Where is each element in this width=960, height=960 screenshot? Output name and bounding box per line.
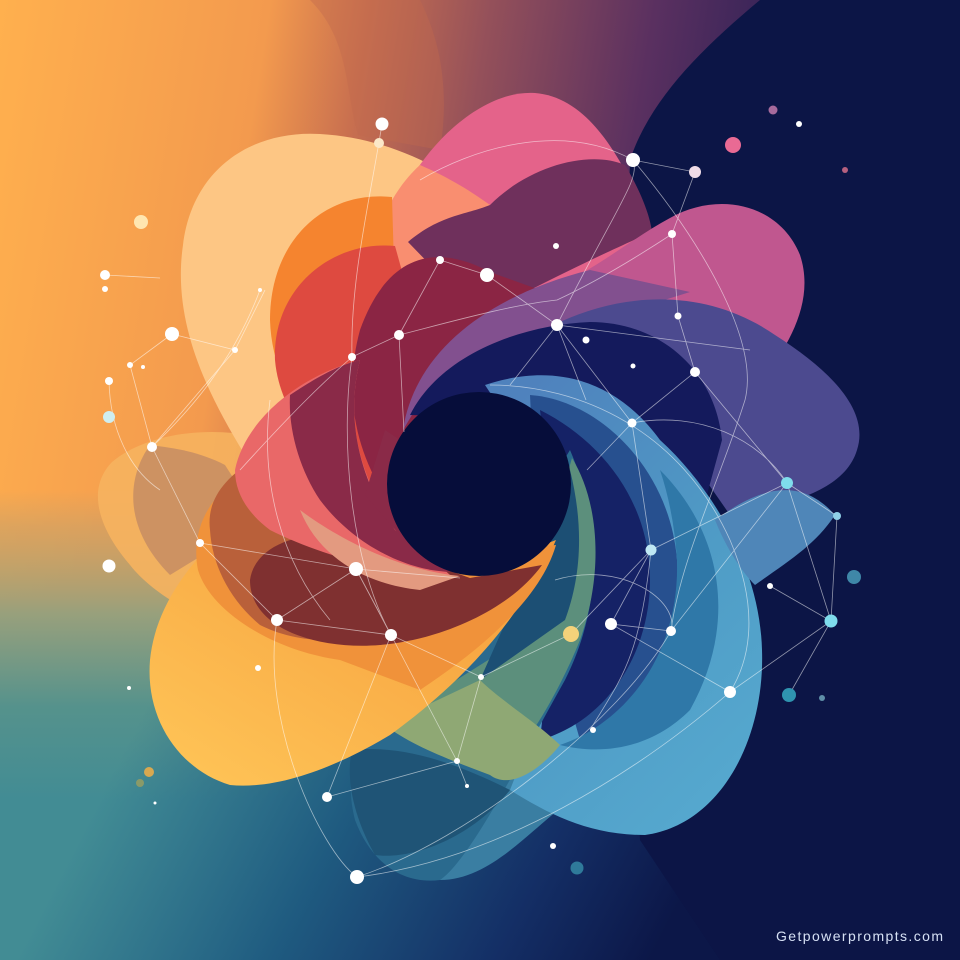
petal: cream top left — [181, 134, 490, 455]
background wave: right navy — [620, 0, 960, 960]
petal: bottom mid-blue lobe — [420, 760, 565, 880]
petal: brown swirl — [210, 440, 460, 640]
dark central circle — [387, 392, 571, 576]
petal: plum overlap — [408, 159, 652, 290]
petal: green band — [385, 458, 596, 760]
petal: red inner — [275, 246, 410, 500]
petal: dark blue bottom — [350, 749, 510, 856]
petal: left pale orange — [98, 432, 320, 642]
petal: teal bottom — [351, 450, 594, 881]
petal: olive band — [385, 680, 560, 780]
petal: orange lower inner — [196, 475, 556, 690]
petal: blue arc right — [560, 470, 718, 749]
petal: maroon patch behind circle — [365, 430, 490, 570]
petal: orange inner — [270, 196, 395, 480]
petal: golden lower-left — [150, 540, 556, 786]
background wave: upper brown band — [310, 0, 444, 150]
petal: left brown overlay — [133, 445, 260, 575]
petal: dark navy inner — [540, 410, 650, 740]
network nodes — [100, 106, 861, 884]
petal: magenta right — [500, 204, 804, 382]
petal: lighter blue swirl — [485, 375, 762, 835]
background wave: bottom blue — [0, 640, 960, 960]
petal: red left swirl — [235, 360, 450, 575]
petal: mid-blue inner — [530, 395, 677, 740]
petal: periwinkle right — [560, 299, 859, 515]
petal: sky wing right — [715, 490, 835, 585]
petal: pink top — [410, 93, 650, 330]
petal: cream-pink overlap — [364, 165, 490, 345]
petal: dark navy hollow — [410, 322, 722, 520]
petal: rust inner — [250, 534, 542, 646]
petal: salmon lower swirl — [300, 510, 460, 590]
network lines — [105, 124, 837, 877]
petals — [98, 93, 859, 881]
petal: violet band — [403, 270, 690, 430]
background wave: lower-left teal — [0, 480, 700, 960]
watermark: Getpowerprompts.com — [776, 928, 943, 944]
petal: maroon swirl — [352, 257, 540, 510]
petal: maroon left swirl — [290, 360, 450, 572]
petal: deep teal inner — [480, 470, 579, 680]
